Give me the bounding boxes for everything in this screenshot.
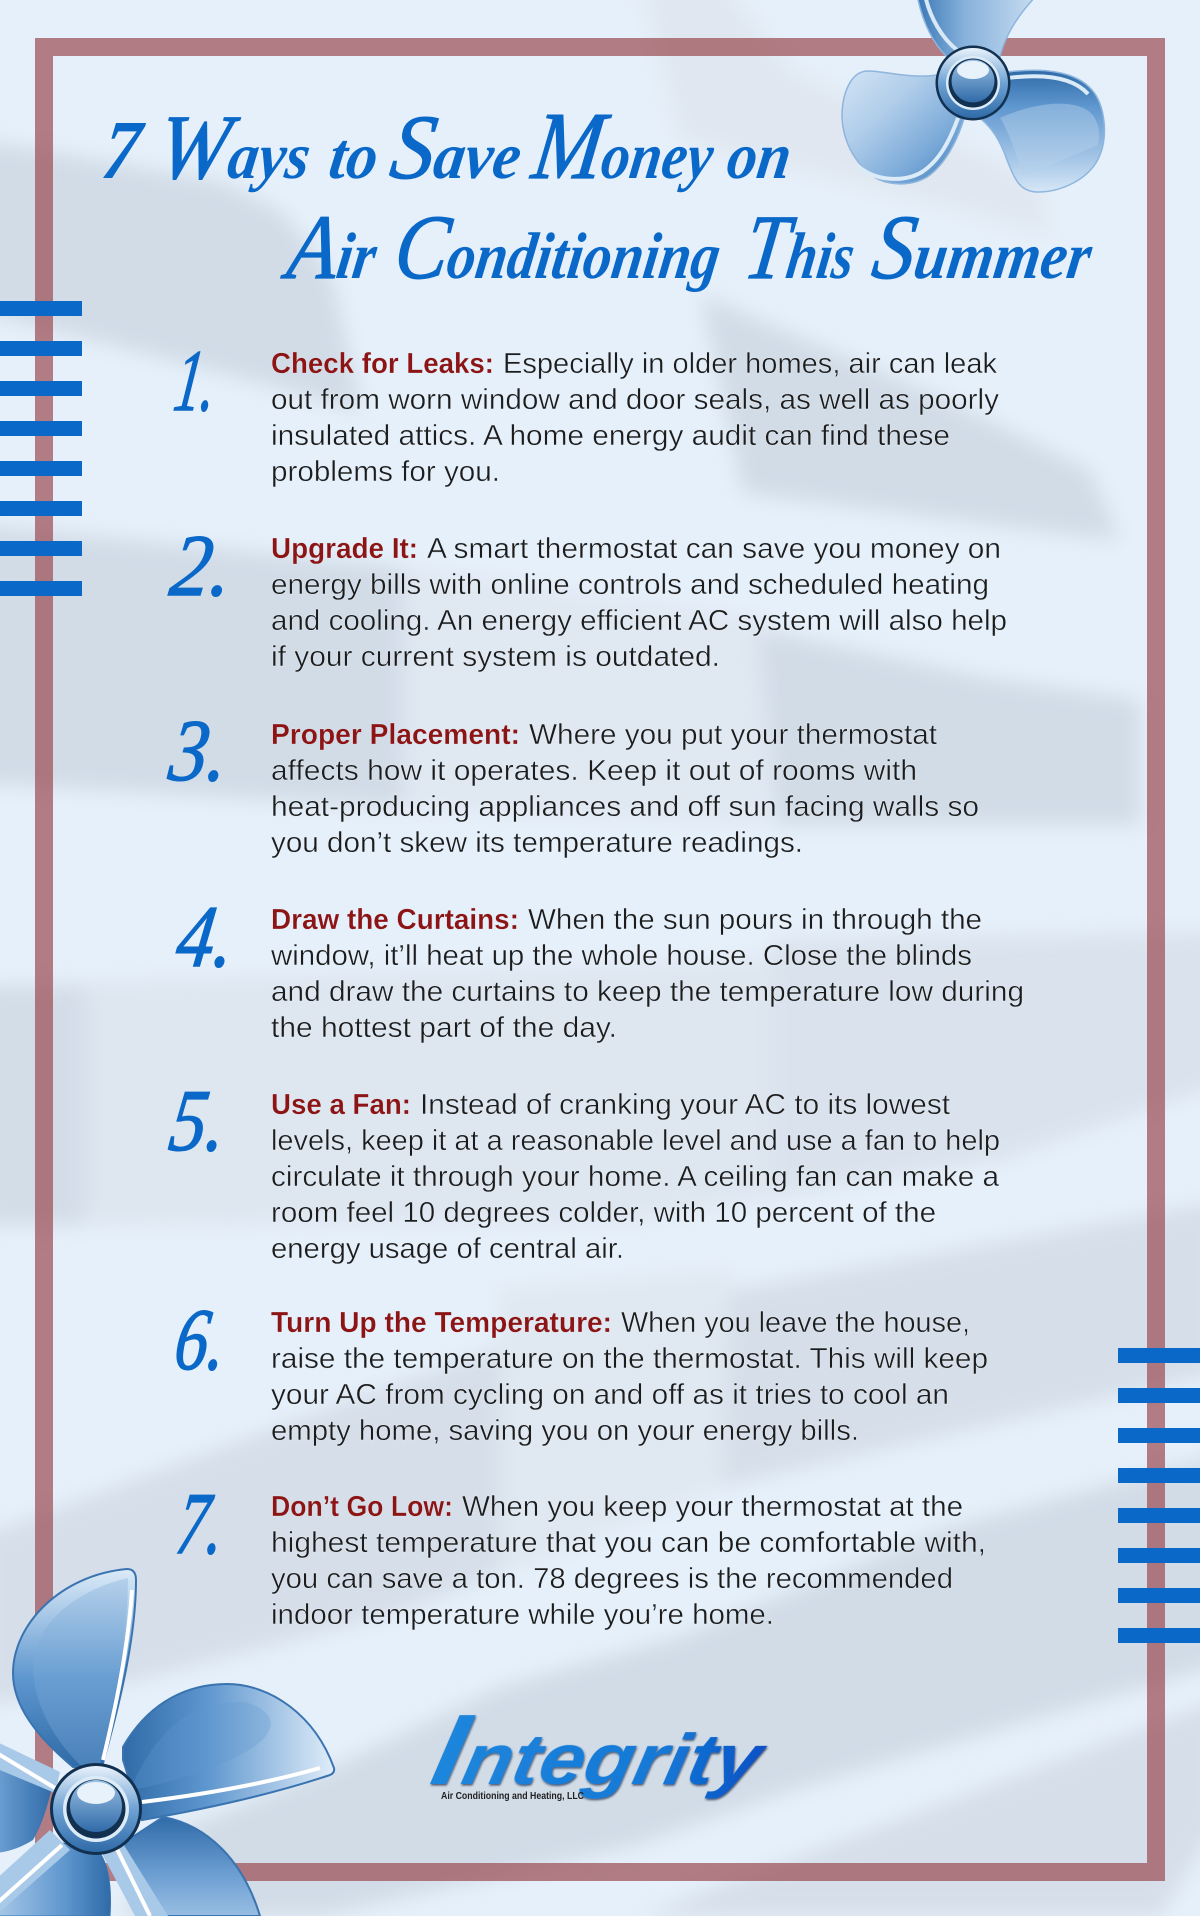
item 5: Use a Fan — [164, 1072, 1000, 1265]
icon: top-right fan — [842, 0, 1104, 192]
item 2: Upgrade It: energy bills with online controls and scheduled heating — [271, 569, 989, 601]
item 4: Draw the Curtains: and draw the curtains to keep the temperature low during — [271, 976, 1024, 1008]
logo: Integrity: Air Conditioning and Heating, LLC — [441, 1790, 584, 1802]
item 7: Don't Go Low — [171, 1475, 986, 1631]
logo: Integrity: Integrity — [423, 1694, 779, 1806]
item 5: Use a Fan: circulate it through your home. A ceiling fan can make a — [271, 1161, 1000, 1193]
title: Save — [385, 96, 529, 198]
item 2: Upgrade It — [165, 517, 1007, 673]
item 2: Upgrade It: A smart thermostat can save you money on — [427, 533, 1001, 565]
item 7: Don't Go Low: highest temperature that you can be comfortable with, — [271, 1527, 986, 1559]
item 2: Upgrade It: if your current system is outdated. — [271, 641, 720, 673]
item 2: Upgrade It: and cooling. An energy efficient AC system will also help — [271, 605, 1007, 637]
item 3: Proper Placement: affects how it operates. Keep it out of rooms with — [271, 755, 917, 787]
item 6: Turn Up the Temperature: 6. — [169, 1291, 233, 1389]
item 2: Upgrade It: 2. — [165, 517, 239, 615]
item 6: Turn Up the Temperature: raise the temperature on the thermostat. This will keep — [271, 1343, 988, 1375]
item 4: Draw the Curtains: window, it’ll heat up the whole house. Close the blinds — [270, 940, 972, 972]
item 2: Upgrade It: Upgrade It: — [271, 533, 418, 565]
item 1: Check for Leaks: insulated attics. A home energy audit can find these — [271, 420, 950, 452]
item 6: Turn Up the Temperature: empty home, saving you on your energy bills. — [271, 1415, 859, 1447]
item 6: Turn Up the Temperature: your AC from cycling on and off as it tries to cool an — [271, 1379, 949, 1411]
title: 7 — [97, 104, 149, 197]
title: Ways — [152, 96, 318, 198]
title: Conditioning — [389, 196, 728, 298]
item 4: Draw the Curtains: the hottest part of the day. — [271, 1012, 617, 1044]
item 3: Proper Placement: heat-producing appliances and off sun facing walls so — [271, 791, 979, 823]
item 5: Use a Fan: Instead of cranking your AC to its lowest — [420, 1089, 950, 1121]
item 4: Draw the Curtains: 4. — [171, 888, 241, 986]
stripes: left — [0, 301, 82, 596]
item 4: Draw the Curtains: When the sun pours in through the — [528, 904, 982, 936]
item 7: Don't Go Low: Don’t Go Low: — [271, 1491, 453, 1523]
item 7: Don't Go Low: indoor temperature while you’re home. — [271, 1599, 774, 1631]
item 5: Use a Fan: levels, keep it at a reasonable level and use a fan to help — [271, 1125, 1000, 1157]
item 3: Proper Placement: you don’t skew its temperature readings. — [271, 827, 803, 859]
title: Money — [525, 92, 723, 199]
item 1: Check for Leaks: 1. — [169, 332, 223, 430]
item 1: Check for Leaks: problems for you. — [271, 456, 500, 488]
item 6: Turn Up the Temperature: Turn Up the Temperature: — [271, 1307, 612, 1339]
item 7: Don't Go Low: When you keep your thermostat at the — [462, 1491, 963, 1523]
item 1: Check for Leaks: out from worn window and door seals, as well as poorly — [271, 384, 1000, 416]
item 6: Turn Up the Temperature: When you leave the house, — [621, 1307, 970, 1339]
icon: bottom-left fan — [0, 1569, 334, 1916]
item 5: Use a Fan: energy usage of central air. — [271, 1233, 624, 1265]
item 3: Proper Placement: 3. — [163, 702, 235, 800]
item 5: Use a Fan: room feel 10 degrees colder, with 10 percent of the — [271, 1197, 936, 1229]
item 3: Proper Placement: Where you put your thermostat — [529, 719, 937, 751]
item 5: Use a Fan: Use a Fan: — [271, 1089, 411, 1121]
item 1: Check for Leaks: Especially in older homes, air can leak — [503, 348, 997, 380]
item 1: Check for Leaks — [169, 332, 1000, 488]
item 6: Turn Up the Temperature — [169, 1291, 988, 1447]
title: on — [723, 120, 796, 193]
title: This — [739, 196, 862, 298]
item 7: Don't Go Low: you can save a ton. 78 degrees is the recommended — [271, 1563, 953, 1595]
title — [97, 92, 1101, 298]
title: Summer — [867, 196, 1101, 298]
item 4: Draw the Curtains: Draw the Curtains: — [271, 904, 519, 936]
item 5: Use a Fan: 5. — [164, 1072, 233, 1170]
item 1: Check for Leaks: Check for Leaks: — [271, 348, 494, 380]
item 4: Draw the Curtains — [171, 888, 1024, 1044]
item 7: Don't Go Low: 7. — [171, 1475, 231, 1573]
item 3: Proper Placement — [163, 702, 979, 859]
title: Air — [277, 196, 386, 298]
item 3: Proper Placement: Proper Placement: — [271, 719, 520, 751]
stripes: right — [1118, 1348, 1200, 1643]
title: to — [325, 120, 383, 193]
